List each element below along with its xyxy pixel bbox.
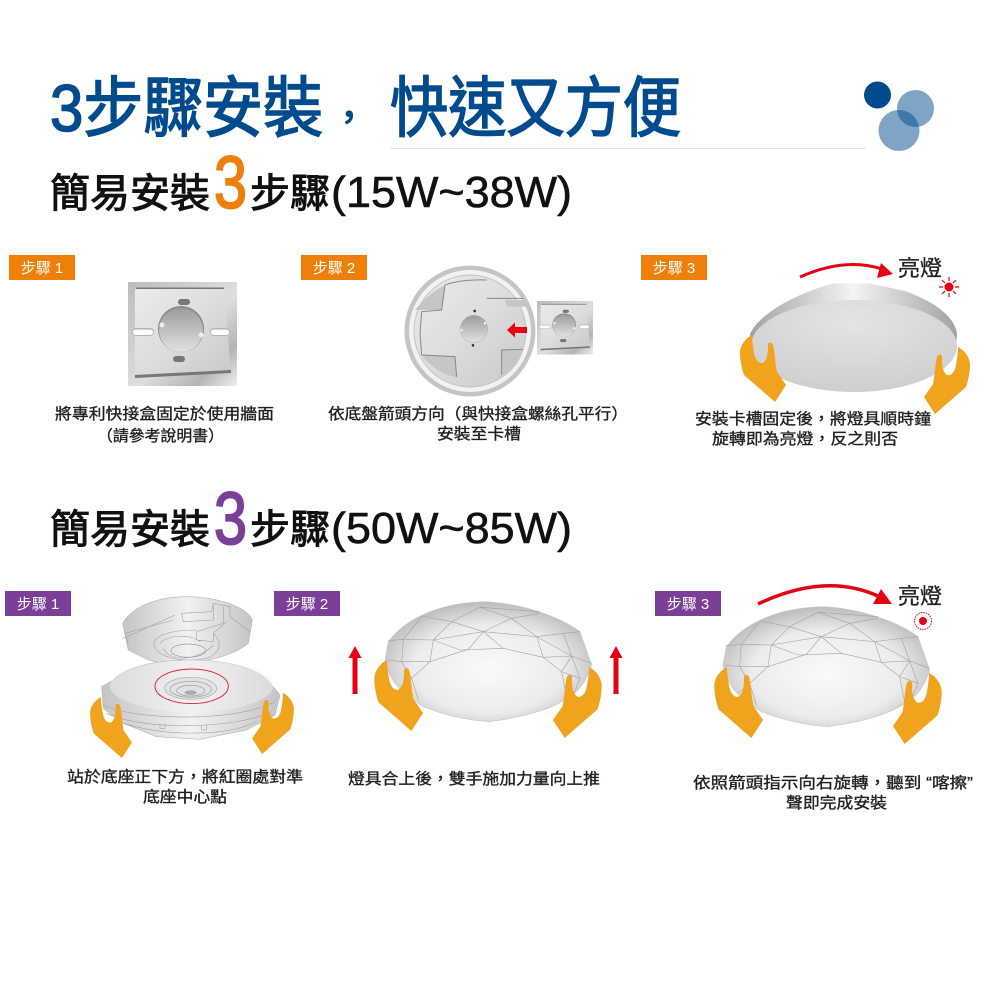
caption: [693, 773, 973, 812]
panel: top step 3: [641, 255, 970, 448]
badge: step 2: 步驟 2: [313, 260, 355, 277]
heading: 15W~38W: 簡易安裝: [50, 172, 210, 216]
arrow: rotate right: [758, 586, 892, 604]
caption: 安裝至卡槽: [437, 425, 521, 443]
icon: right hand: [252, 693, 294, 754]
badge: step 2: [301, 255, 367, 280]
illustration: dome lamp: [723, 607, 930, 727]
badge: step 1: 步驟 1: [21, 260, 63, 277]
caption: （請參考說明書）: [97, 427, 224, 445]
illustration: base disc with plate: [404, 266, 593, 396]
icon: left hand: [374, 660, 423, 731]
illustration: base and lamp body: [102, 597, 280, 739]
panel: bottom step 1: [5, 591, 303, 806]
title: [50, 71, 681, 145]
caption: 依照箭頭指示向右旋轉，聽到 “喀擦”: [693, 773, 973, 792]
panel: bottom step 2: [274, 591, 622, 788]
illustration: lamp rotating: [750, 280, 957, 392]
badge: step 1: [9, 255, 75, 280]
heading: 15W~38W: [50, 141, 572, 224]
caption: 底座中心點: [143, 788, 227, 806]
badge: step 3: 步驟 3: [653, 260, 695, 277]
caption: 旋轉即為亮燈，反之則否: [712, 430, 898, 448]
badge: step 1: 步驟 1: [17, 596, 59, 613]
caption: [55, 405, 274, 445]
badge: step 3: 步驟 3: [667, 596, 709, 613]
panel: top step 2: [301, 255, 628, 443]
panel: bottom step 3: [655, 584, 973, 812]
heading: 50W~85W: [50, 477, 572, 560]
icon: right hand: [924, 347, 970, 414]
arrow: up left: [348, 646, 362, 694]
arrow: up right: [610, 646, 622, 694]
heading: 15W~38W: 3: [214, 141, 247, 224]
badge: step 3: [641, 255, 707, 280]
arrow: rotate right: [800, 263, 893, 278]
caption: [328, 404, 628, 443]
badge: step 2: 步驟 2: [286, 596, 328, 613]
heading: 50W~85W: (50W~85W): [331, 504, 572, 553]
icon: red dot: [914, 612, 932, 630]
caption: 燈具合上後，雙手施加力量向上推: [348, 770, 600, 788]
heading: 50W~85W: 3: [214, 477, 247, 560]
label: light on: 亮燈: [898, 256, 942, 281]
icon: left hand: [740, 335, 786, 402]
caption: 依底盤箭頭方向（與快接盒螺絲孔平行）: [328, 404, 628, 423]
badge: step 3: [655, 591, 721, 616]
caption: [695, 410, 931, 448]
title: 3步驟安裝: [50, 71, 323, 145]
heading: 15W~38W: 步驟: [250, 172, 330, 216]
icon: right hand: [553, 667, 602, 738]
badge: step 1: [5, 591, 71, 616]
icon: red burst: [939, 277, 959, 297]
heading: 50W~85W: 步驟: [250, 508, 330, 552]
badge: step 2: [274, 591, 340, 616]
icon: left hand: [714, 667, 763, 738]
heading: 50W~85W: 簡易安裝: [50, 508, 210, 552]
caption: [67, 768, 303, 806]
icon: right hand: [893, 673, 942, 744]
illustration: dome lamp: [385, 602, 592, 722]
icon: overlapping circles: [864, 82, 934, 151]
caption: 站於底座正下方，將紅圈處對準: [67, 768, 303, 786]
heading: 15W~38W: (15W~38W): [331, 168, 572, 217]
title: 快速又方便: [390, 71, 681, 145]
caption: 將專利快接盒固定於使用牆面: [55, 405, 274, 423]
icon: left hand: [90, 697, 132, 758]
panel: top step 1: [9, 255, 274, 445]
title: ，: [339, 78, 375, 130]
caption: 安裝卡槽固定後，將燈具順時鐘: [695, 410, 931, 428]
caption: 聲即完成安裝: [786, 794, 887, 812]
illustration: quick-connect plate: [128, 282, 237, 386]
label: light on: 亮燈: [898, 584, 942, 609]
